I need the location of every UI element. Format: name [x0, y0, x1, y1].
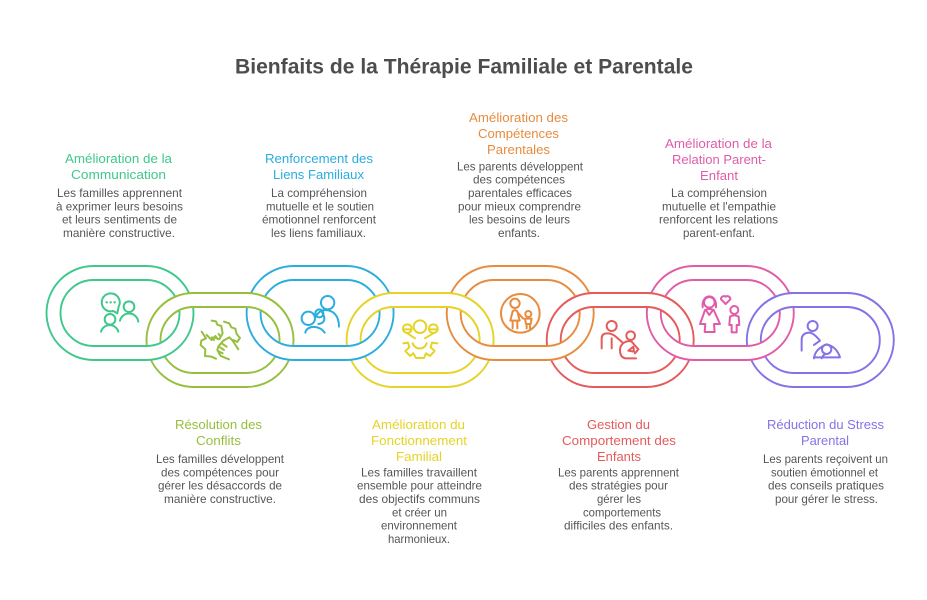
- icon: parent caring for baby: [802, 321, 840, 358]
- heading: Gestion du: [587, 417, 650, 432]
- heading: Réduction du Stress: [767, 417, 884, 432]
- description: [357, 466, 482, 546]
- heading: Parentales: [487, 142, 550, 157]
- description: Les familles apprennent: [57, 187, 183, 200]
- description: ensemble pour atteindre: [357, 480, 482, 493]
- link 5: compétences parentales: [447, 266, 594, 360]
- heading: [562, 417, 676, 464]
- heading: Conflits: [196, 433, 241, 448]
- chain of interlocking links: [47, 266, 894, 387]
- heading: Fonctionnement: [371, 433, 467, 448]
- description: renforcent les relations: [659, 214, 778, 227]
- description: comportements: [583, 506, 661, 519]
- panel: amélioration de la communication: [56, 151, 183, 240]
- description: Les parents apprennent: [558, 466, 680, 479]
- icon: clasped hands: [201, 321, 240, 359]
- panel: résolution des conflits: [156, 417, 285, 506]
- heading: Familial: [396, 449, 442, 464]
- heading: Amélioration de la: [65, 151, 173, 166]
- description: gérer les désaccords de: [158, 480, 282, 493]
- description: Les familles développent: [156, 453, 285, 466]
- description: enfants.: [498, 227, 540, 240]
- panel: amélioration de la relation parent-enfant: [659, 136, 778, 240]
- description: [156, 453, 285, 506]
- heading: Amélioration de la: [665, 136, 773, 151]
- description: [262, 187, 377, 240]
- description: soutien émotionnel et: [771, 466, 879, 479]
- icon: parent and child in circle: [501, 294, 540, 333]
- description: manière constructive.: [63, 227, 175, 240]
- icon: adult helping child: [602, 321, 638, 358]
- link 6: comportement des enfants: [547, 293, 694, 387]
- description: [763, 453, 888, 506]
- description: des compétences: [473, 174, 565, 187]
- link 8: stress parental: [747, 293, 894, 387]
- description: [659, 187, 778, 240]
- icon: people talking: [101, 293, 138, 332]
- description: La compréhension: [671, 187, 767, 200]
- description: manière constructive.: [164, 493, 276, 506]
- heading: Renforcement des: [265, 151, 373, 166]
- description: pour gérer le stress.: [775, 493, 878, 506]
- description: parentales efficaces: [468, 187, 572, 200]
- description: à exprimer leurs besoins: [56, 200, 183, 213]
- heading: Enfant: [700, 168, 738, 183]
- link 7: relation parent-enfant: [647, 266, 794, 360]
- description: des conseils pratiques: [768, 480, 884, 493]
- description: La compréhension: [271, 187, 367, 200]
- description: les besoins de leurs: [469, 214, 570, 227]
- description: environnement: [381, 520, 458, 533]
- description: mutuelle et le soutien: [266, 200, 374, 213]
- description: gérer les: [597, 493, 641, 506]
- panel: réduction du stress parental: [763, 417, 888, 506]
- icon: mother, heart and child: [700, 296, 739, 332]
- heading: Communication: [71, 167, 166, 182]
- heading: [265, 151, 373, 182]
- heading: Amélioration du: [372, 417, 465, 432]
- heading: [371, 417, 467, 464]
- icon: team and gear: [403, 320, 438, 358]
- description: pour mieux comprendre: [458, 200, 581, 213]
- panel: renforcement des liens familiaux: [262, 151, 377, 240]
- panel: amélioration du fonctionnement familial: [357, 417, 482, 546]
- description: des objectifs communs: [359, 493, 480, 506]
- description: [56, 187, 183, 240]
- title: Bienfaits de la Thérapie Familiale et Parentale: [235, 56, 693, 78]
- link 1: communication: [47, 266, 193, 360]
- description: Les parents reçoivent un: [763, 453, 888, 466]
- description: des compétences pour: [161, 466, 279, 479]
- heading: Comportement des: [562, 433, 676, 448]
- heading: [665, 136, 773, 183]
- heading: [767, 417, 884, 448]
- description: et leurs sentiments de: [62, 214, 177, 227]
- heading: Compétences: [478, 126, 559, 141]
- link 2: résolution des conflits: [147, 293, 293, 387]
- description: mutuelle et l'empathie: [662, 200, 776, 213]
- description: harmonieux.: [388, 533, 450, 546]
- heading: [65, 151, 173, 182]
- heading: Résolution des: [175, 417, 262, 432]
- heading: [175, 417, 262, 448]
- heading: Liens Familiaux: [273, 167, 365, 182]
- description: difficiles des enfants.: [564, 520, 673, 533]
- description: Les parents développent: [457, 160, 584, 173]
- description: [558, 466, 680, 533]
- panel: amélioration des compétences parentales: [457, 110, 584, 240]
- description: les liens familiaux.: [271, 227, 366, 240]
- icon: parent holding child: [302, 296, 339, 333]
- description: [457, 160, 584, 240]
- heading: Enfants: [597, 449, 641, 464]
- description: parent-enfant.: [683, 227, 755, 240]
- panel: gestion du comportement des enfants: [558, 417, 680, 533]
- description: et créer un: [392, 506, 447, 519]
- upper crossings where the lower links pass over: [148, 292, 893, 326]
- description: des stratégies pour: [569, 480, 668, 493]
- link 4: fonctionnement familial: [347, 293, 494, 387]
- description: émotionnel renforcent: [262, 214, 377, 227]
- link 3: liens familiaux: [247, 266, 394, 360]
- description: Les familles travaillent: [361, 466, 478, 479]
- heading: Amélioration des: [469, 110, 568, 125]
- heading: Parental: [801, 433, 849, 448]
- heading: [469, 110, 568, 157]
- heading: Relation Parent-: [672, 152, 766, 167]
